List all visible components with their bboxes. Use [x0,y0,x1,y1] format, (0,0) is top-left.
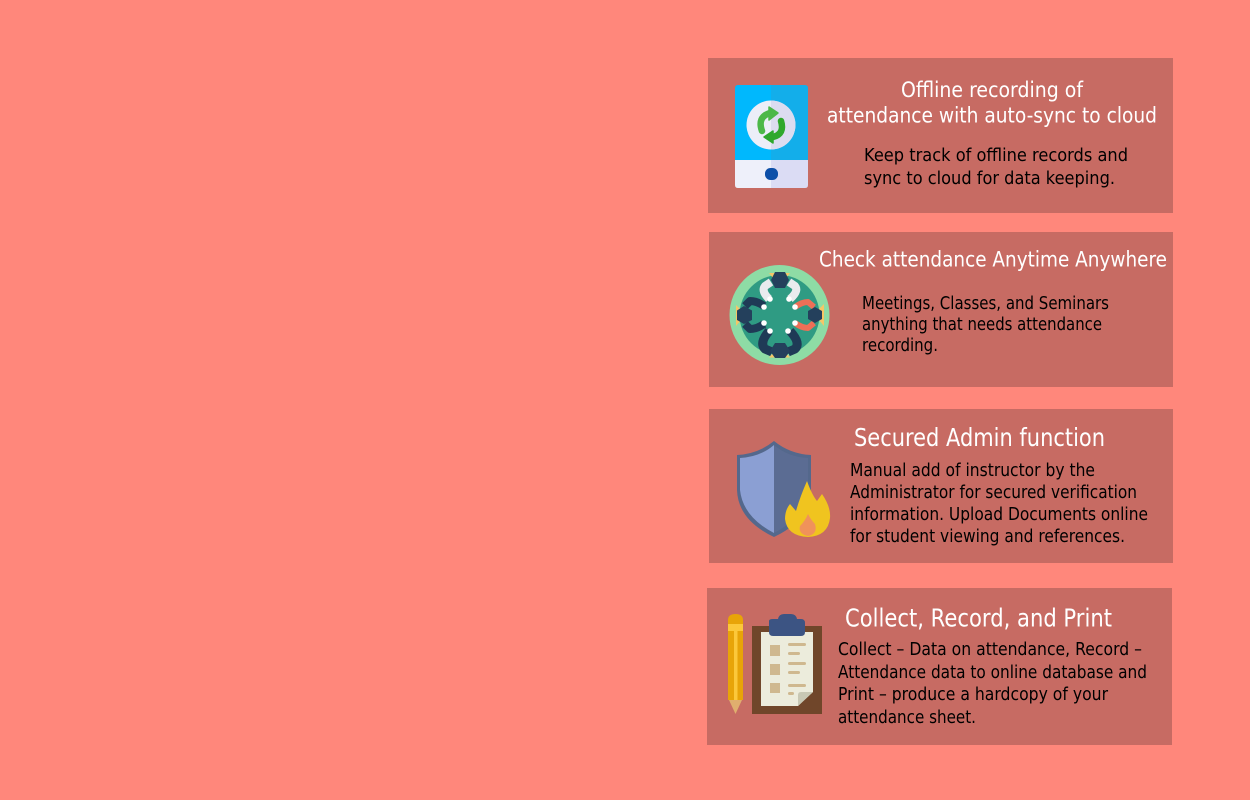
text: secured admin description: information. Upload Documents online [850,505,1148,525]
text: secured admin description: Manual add of instructor by the [850,461,1095,481]
text: offline description: sync to cloud for data keeping. [864,169,1115,189]
icon: pencil [728,614,743,714]
icon: meeting table [730,265,830,365]
text: secured admin description: Administrator for secured verification [850,483,1137,503]
text: collect record print description: attendance sheet. [838,708,976,728]
panel: collect record print [707,588,1172,745]
text: collect record print description: Collect – Data on attendance, Record – [838,640,1142,660]
heading: offline recording: Offline recording of [901,78,1083,103]
text: check attendance description: recording. [862,336,938,356]
icon: clipboard [752,614,822,714]
text: check attendance description [862,294,1109,356]
text: collect record print description [838,640,1147,728]
text: secured admin description: for student viewing and references. [850,527,1125,547]
heading: collect record print: Collect, Record, and Print [845,604,1112,632]
heading: offline recording [827,78,1157,128]
heading: secured admin: Secured Admin function [854,423,1105,452]
panel: secured admin [709,409,1173,563]
icon: shield with flame [737,441,830,537]
heading: check attendance: Check attendance Anytime Anywhere [819,248,1167,272]
panel: offline recording [708,58,1173,213]
text: collect record print description: Attendance data to online database and [838,663,1147,683]
text: secured admin description [850,461,1148,547]
text: collect record print description: Print – produce a hardcopy of your [838,685,1109,705]
heading: offline recording: attendance with auto-sync to cloud [827,104,1157,128]
icon: phone with sync [735,85,808,188]
panel: check attendance [709,232,1173,387]
text: offline description [864,146,1128,189]
text: offline description: Keep track of offline records and [864,146,1128,166]
text: check attendance description: Meetings, Classes, and Seminars [862,294,1109,314]
text: check attendance description: anything that needs attendance [862,315,1102,335]
